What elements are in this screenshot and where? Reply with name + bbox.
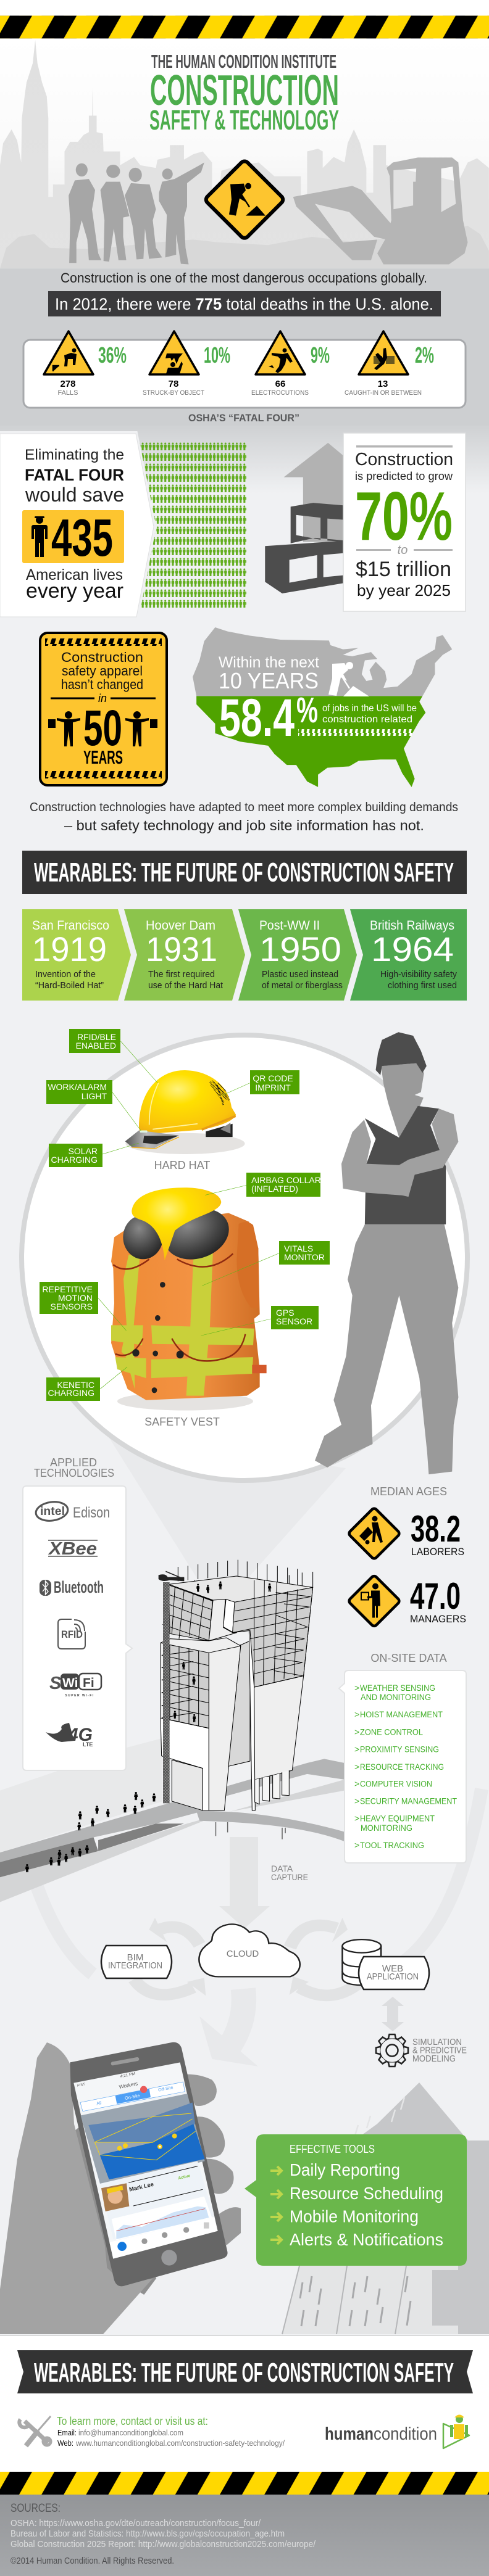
on-site data list: > (354, 1814, 359, 1823)
panel: on-site data: ON-SITE DATA (370, 1652, 447, 1664)
solar brim (125, 1130, 179, 1149)
cloud: CLOUD (227, 1949, 259, 1959)
panel: OSHA fatal four (23, 331, 466, 424)
on-site data list: > (354, 1779, 359, 1789)
icon: manager diamond (348, 1575, 400, 1627)
US map: jobs statistic (193, 627, 452, 787)
hazard: falls: 278 (60, 379, 76, 389)
cloud (199, 1924, 300, 1976)
1950 (238, 909, 357, 1001)
logo: 4G LTE (46, 1723, 93, 1748)
simulation and predictive modeling: MODELING (412, 2054, 456, 2064)
tool: alerts and notifications: Alerts & Notifications (290, 2230, 443, 2249)
BIM integration: INTEGRATION (108, 1960, 162, 1971)
panel: eliminating the fatal four: every year (26, 579, 123, 603)
1964 (350, 909, 467, 1001)
panel: apparel sign 50 years (40, 633, 167, 785)
on-site data list: MONITORING (361, 1823, 412, 1833)
site map (81, 2094, 205, 2187)
panel: apparel sign 50 years: Construction (61, 650, 143, 665)
label: solar charging: SOLAR (69, 1146, 98, 1156)
1950: Post-WW II (259, 919, 320, 933)
on-site data list: WEATHER SENSING (360, 1683, 435, 1693)
hazard: struck-by object: STRUCK-BY OBJECT (143, 389, 204, 397)
sources footer: Global Construction 2025 Report: http://www.globalconstruction2025.com/europe/ (10, 2539, 316, 2549)
face (381, 1063, 424, 1137)
worker silhouettes (69, 162, 204, 265)
logo: RFID: RFID (61, 1629, 83, 1640)
data flow arrows (134, 1918, 359, 2066)
panel: eliminating the fatal four: FATAL FOUR (25, 466, 124, 484)
vest tag (252, 1365, 267, 1373)
tool: resource scheduling: Resource Scheduling (290, 2184, 443, 2203)
logo: intel edison: Edison (73, 1505, 110, 1521)
hard hat illustration (125, 1070, 245, 1154)
simulation and predictive modeling (376, 2034, 467, 2066)
wearables circle (22, 1035, 467, 1480)
logo: human condition (325, 2414, 469, 2448)
on-site data list: AND MONITORING (361, 1692, 431, 1702)
logo: super wifi (49, 1674, 101, 1698)
1931 (124, 909, 245, 1001)
simulation and predictive modeling: & PREDICTIVE (412, 2046, 467, 2055)
site ground and roads (0, 1738, 345, 1902)
panel: on-site data (339, 1652, 466, 1863)
1964: clothing first used (388, 980, 457, 991)
on-site data list: > (354, 1762, 359, 1772)
city skyline (0, 40, 489, 268)
worker card: Mark Lee (128, 2181, 154, 2193)
label: repetitive motion sensors: REPETITIVE (42, 1284, 93, 1294)
hazard: caught-in or between (345, 331, 434, 397)
label: work/alarm light: WORK/ALARM (48, 1082, 107, 1092)
transition statement: Construction technologies have adapted to meet more complex building demands (30, 801, 458, 814)
on-site data list: SECURITY MANAGEMENT (360, 1796, 457, 1806)
arrow: data capture: DATA (271, 1864, 293, 1873)
US map: jobs statistic: 10 YEARS (219, 668, 319, 693)
on-site data list: ZONE CONTROL (360, 1727, 423, 1737)
icon: shoveling worker (328, 662, 369, 696)
heading: TECHNOLOGIES (34, 1467, 114, 1479)
transition statement: – but safety technology and job site information has not. (64, 817, 424, 833)
logo: human condition: human (325, 2424, 374, 2444)
panel: applied technologies (23, 1456, 132, 1770)
panel: apparel sign 50 years: safety apparel (62, 663, 143, 679)
label: RFID/BLE: ENABLED (76, 1041, 116, 1051)
map shape (193, 627, 452, 787)
US map: jobs statistic: of jobs in the US will be (322, 703, 417, 714)
label: QR code: IMPRINT (255, 1083, 291, 1092)
hand holding phone (0, 2042, 241, 2334)
panel: median ages (348, 1485, 466, 1627)
arrow: data capture (219, 1837, 308, 1928)
hazard: falls: FALLS (57, 389, 78, 397)
panel: median ages: MEDIAN AGES (370, 1485, 447, 1498)
contact details: Email: (57, 2428, 77, 2437)
1919 (22, 909, 131, 1001)
web application and database (342, 1939, 429, 1989)
on-site data list: > (354, 1796, 359, 1806)
hazard: electrocutions (251, 331, 330, 397)
activity chart (112, 2197, 212, 2240)
panel: 70% growth: to (398, 543, 408, 557)
rebar (178, 1560, 313, 1593)
contact details: To learn more, contact or visit us at: (57, 2415, 208, 2427)
app tab bar (109, 2217, 218, 2259)
icon: growth arrow and concrete blocks (265, 443, 346, 593)
tool: daily reporting: Daily Reporting (290, 2160, 400, 2179)
arrow: data capture: CAPTURE (271, 1872, 308, 1882)
dome (139, 1070, 236, 1134)
on-site data list: > (354, 1840, 359, 1850)
crane (159, 1571, 184, 1803)
panel: apparel sign 50 years: YEARS (83, 746, 123, 768)
subtitle: SAFETY & TECHNOLOGY (149, 104, 339, 136)
hazard: electrocutions: ELECTROCUTIONS (251, 389, 309, 397)
1964: British Railways (370, 919, 454, 933)
panel: effective tools (244, 2134, 467, 2266)
panel: eliminating the fatal four: American lives (26, 566, 123, 584)
crossed arms (341, 1108, 458, 1197)
shadow (125, 1133, 245, 1154)
contact details: www.humanconditionglobal.com/construction-safety-technology/ (75, 2438, 285, 2448)
1919: Invention of the (35, 969, 96, 980)
deaths statement bar: In 2012, there were 775 total deaths in the U.S. alone. (55, 295, 433, 313)
US map: jobs statistic: % (296, 690, 318, 730)
core wall (161, 1600, 241, 1653)
institute name: THE HUMAN CONDITION INSTITUTE (151, 51, 336, 72)
app tabs (77, 2072, 185, 2112)
label: RFID/BLE (69, 1029, 120, 1053)
workers on building (173, 1581, 271, 1722)
hazard: electrocutions: 9% (311, 342, 330, 368)
hazard: struck-by object: 78 (169, 379, 178, 389)
wearable labels (40, 1029, 330, 1401)
contact details: Web: (57, 2438, 73, 2448)
contact details (57, 2415, 285, 2448)
panel: median ages: 38.2 (411, 1508, 461, 1550)
skyline with workers and excavator (0, 40, 489, 268)
label: solar charging: CHARGING (51, 1155, 98, 1165)
big arrow down to phone (228, 1989, 244, 2049)
label: vitals monitor: MONITOR (284, 1252, 325, 1262)
icon: worker right (125, 711, 157, 746)
funnel from wearables circle to building (105, 1431, 346, 1579)
sources footer: SOURCES: (10, 2502, 61, 2515)
bushes (0, 226, 489, 268)
panel: 70% growth: 70% (355, 478, 453, 555)
1931: Hoover Dam (146, 919, 215, 933)
sources footer: OSHA: https://www.osha.gov/dte/outreach/construction/focus_four/ (10, 2518, 261, 2529)
panel: apparel sign 50 years: hasn’t changed (61, 677, 143, 692)
label: kenetic charging (46, 1377, 100, 1401)
excavator (293, 157, 468, 265)
BIM integration (101, 1946, 172, 1978)
closing banner (17, 2350, 473, 2393)
1919: “Hard-Boiled Hat” (35, 980, 104, 991)
1950: Plastic used instead (262, 969, 338, 980)
panel: 70% growth (343, 433, 466, 611)
icon: gear (376, 2034, 408, 2066)
simulation and predictive modeling: SIMULATION (412, 2037, 462, 2047)
label: kenetic charging: CHARGING (48, 1388, 94, 1398)
hazard: struck-by object (143, 331, 230, 397)
1919: 1919 (32, 930, 107, 968)
on-site data list: > (354, 1727, 359, 1737)
on-site data list: > (354, 1683, 359, 1693)
transition statement (30, 801, 458, 833)
panel: median ages: LABORERS (411, 1546, 464, 1558)
yellow 435 box (22, 509, 124, 568)
office building silhouette (282, 2083, 489, 2334)
pocket flaps (113, 1253, 245, 1361)
on-site data list: RESOURCE TRACKING (360, 1762, 444, 1772)
1950: of metal or fiberglass (262, 980, 343, 991)
sources footer (0, 2495, 489, 2576)
speaker (113, 2059, 137, 2063)
shadow (117, 1392, 253, 1411)
sources footer: ©2014 Human Condition. All Rights Reserved. (10, 2556, 174, 2566)
logo: Bluetooth: Bluetooth (54, 1578, 104, 1596)
logo: super wifi: SUPER WI-FI (65, 1694, 94, 1698)
on-site data list: > (354, 1709, 359, 1719)
logo: XBee: XBee (48, 1539, 97, 1559)
worker card (100, 2161, 214, 2239)
label: GPS sensor (271, 1306, 319, 1329)
label: airbag collar: AIRBAG COLLAR (251, 1175, 321, 1185)
logo: RFID (58, 1619, 85, 1649)
label: vitals monitor (279, 1241, 330, 1265)
map pins (117, 2134, 177, 2151)
hazard: caught-in or between: CAUGHT-IN OR BETWEEN (345, 389, 422, 397)
US map: jobs statistic: Within the next (219, 654, 319, 671)
lower left scaffold floors (161, 1643, 209, 1728)
US map: jobs statistic: construction related (322, 714, 412, 725)
site workers on road (25, 1792, 156, 1872)
top hazard stripe (0, 15, 489, 38)
buttons (132, 1282, 184, 1393)
icon: wrench and screwdriver (19, 2416, 51, 2446)
label: RFID/BLE: RFID/BLE (77, 1032, 116, 1042)
airbag collar (123, 1215, 163, 1259)
panel: 70% growth: $15 trillion (356, 558, 451, 581)
web application and database: APPLICATION (367, 1971, 419, 1982)
trousers and tool belt (315, 1224, 458, 1474)
app tabs: Workers (119, 2080, 138, 2090)
on-site data list (354, 1683, 457, 1850)
panel: effective tools: EFFECTIVE TOOLS (290, 2143, 375, 2155)
logo: human condition: condition (374, 2424, 437, 2444)
rear fingers (179, 2074, 241, 2245)
logo: 4G LTE: LTE (83, 1741, 93, 1748)
label: repetitive motion sensors: SENSORS (51, 1302, 93, 1311)
upper right scaffold floors (233, 1580, 313, 1687)
home button (161, 2250, 177, 2266)
1931: 1931 (146, 930, 217, 968)
logo: Bluetooth (40, 1578, 104, 1596)
hazard: falls: 36% (98, 342, 127, 368)
callout lines (98, 1041, 279, 1389)
phone body (70, 2042, 228, 2286)
green people grid: 435 lives (137, 442, 247, 609)
1964: 1964 (371, 930, 454, 968)
app tabs: Off-Site (157, 2084, 173, 2093)
US map: jobs statistic: 58.4 (219, 688, 295, 748)
logo: 4G LTE: 4G (67, 1725, 93, 1745)
web application and database: WEB (382, 1963, 403, 1974)
icon: database (342, 1939, 381, 1985)
number 50: 50 (83, 700, 122, 756)
reflective stripes (111, 1250, 254, 1396)
logo: intel edison: intel (40, 1505, 65, 1518)
logo: super wifi: Fi (83, 1676, 94, 1690)
panel: eliminating the fatal four (0, 433, 154, 617)
hazard: struck-by object: 10% (204, 342, 230, 368)
on-site data list: HOIST MANAGEMENT (360, 1709, 443, 1719)
on-site data list: TOOL TRACKING (360, 1840, 424, 1850)
worker silhouette (315, 1032, 458, 1474)
panel: 70% growth: Construction (355, 450, 453, 469)
hazard: caught-in or between: 13 (378, 379, 388, 389)
label: QR code: QR CODE (253, 1073, 293, 1083)
rear strap (206, 1124, 233, 1137)
icon: road work diamond sign (204, 160, 285, 240)
on-site data list: HEAVY EQUIPMENT (360, 1814, 435, 1823)
panel: median ages: MANAGERS (410, 1613, 466, 1625)
panel: eliminating the fatal four: would save (25, 484, 124, 506)
vest body (111, 1213, 260, 1400)
yellow 435 box: 435 (51, 509, 113, 568)
hazard: caught-in or between: 2% (415, 342, 434, 368)
label: vitals monitor: VITALS (284, 1244, 313, 1253)
safety vest (365, 1106, 446, 1224)
logo card (23, 1486, 132, 1770)
heading: APPLIED (50, 1456, 97, 1469)
safety vest illustration (111, 1187, 267, 1411)
label: repetitive motion sensors (40, 1282, 98, 1314)
on-site data list: > (354, 1744, 359, 1754)
lower palm (56, 2126, 156, 2295)
icon: worker left (48, 711, 80, 746)
hazard: falls (44, 331, 127, 397)
label: GPS sensor: GPS (276, 1308, 295, 1318)
logo: super wifi: Wi (62, 1676, 78, 1690)
label: repetitive motion sensors: MOTION (58, 1293, 93, 1303)
screen (73, 2062, 218, 2259)
lower columns (161, 1629, 304, 1810)
label: airbag collar (246, 1173, 321, 1197)
safety vest caption: SAFETY VEST (144, 1416, 220, 1428)
hazard: electrocutions: 66 (275, 379, 285, 389)
BIM integration: BIM (127, 1952, 143, 1963)
tool: mobile monitoring: Mobile Monitoring (290, 2207, 419, 2226)
heading (34, 1456, 114, 1479)
1964: High-visibility safety (380, 969, 457, 980)
panel: eliminating the fatal four: Eliminating the (25, 447, 124, 463)
1950: 1950 (259, 930, 341, 968)
1931: use of the Hard Hat (148, 980, 224, 991)
QR code imprint (210, 1081, 230, 1105)
hard hat (376, 1032, 427, 1075)
on-site data list: COMPUTER VISION (360, 1779, 432, 1789)
section banner (22, 851, 467, 894)
main title: CONSTRUCTION (150, 66, 339, 114)
palm (0, 2042, 153, 2334)
upper left scaffold floors (162, 1580, 214, 1641)
building under construction (159, 1560, 313, 1810)
label: work/alarm light: LIGHT (82, 1091, 107, 1101)
top slab (169, 1576, 313, 1602)
panel: 70% growth: by year 2025 (357, 581, 451, 600)
sources footer: Bureau of Labor and Statistics: http://www.bls.gov/cps/occupation_age.htm (10, 2529, 285, 2539)
title (149, 51, 339, 136)
label: GPS sensor: SENSOR (276, 1316, 312, 1326)
icon: worker (31, 516, 48, 557)
panel: apparel sign 50 years: in (98, 692, 107, 704)
label: solar charging (49, 1144, 102, 1167)
intro text: Construction is one of the most dangerous occupations globally. (61, 270, 427, 286)
logo: super wifi: S (49, 1674, 62, 1693)
label: kenetic charging: KENETIC (57, 1380, 94, 1390)
timeline chevrons (22, 909, 467, 1001)
panel: median ages: 47.0 (410, 1575, 461, 1617)
app tabs: On-Site (124, 2092, 140, 2101)
contact details: info@humanconditionglobal.com (78, 2428, 183, 2437)
ghost background arrows (12, 1789, 482, 1974)
label: airbag collar: (INFLATED) (251, 1184, 298, 1194)
icon: laborer diamond (348, 1508, 400, 1559)
logo: intel edison (35, 1500, 110, 1522)
app tabs: AT&T (77, 2083, 86, 2088)
label: work/alarm light (46, 1080, 112, 1104)
panel: 70% growth: is predicted to grow (355, 470, 453, 482)
panel caption: OSHA’S “FATAL FOUR” (188, 412, 299, 424)
1931: The first required (148, 969, 215, 980)
on-site data list: PROXIMITY SENSING (360, 1744, 439, 1754)
bottom hazard stripe (0, 2472, 489, 2495)
app tabs: 4:21 PM (120, 2072, 136, 2079)
arrow: double headed (382, 1997, 404, 2031)
hard hat caption: HARD HAT (154, 1159, 210, 1171)
1919: San Francisco (32, 919, 109, 933)
label: QR code (250, 1070, 299, 1094)
worker card: Active (178, 2174, 191, 2181)
app tabs: All (96, 2100, 102, 2107)
